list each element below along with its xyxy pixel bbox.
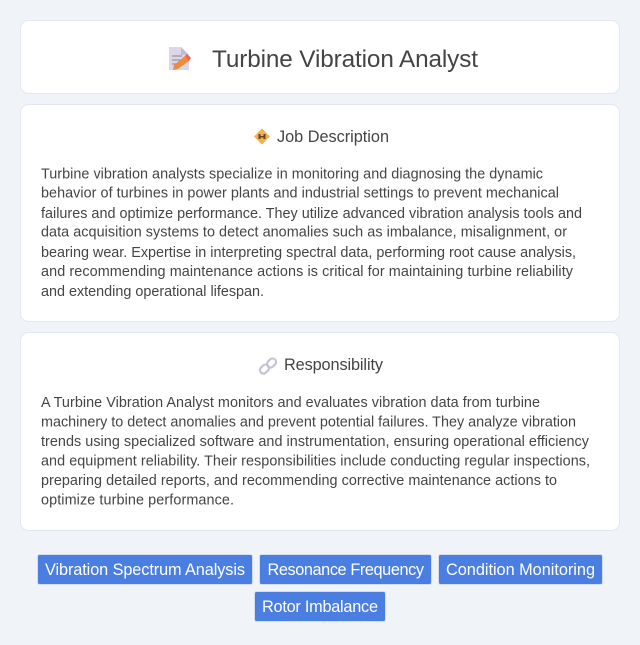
tag: condition monitoring: [438, 554, 602, 584]
tag: rotor imbalance: [254, 592, 386, 622]
responsibility text: preparing detailed reports, and recommending corrective maintenance actions to: [41, 473, 557, 489]
job description text: and recommending maintenance actions is critical for maintaining turbine reliability: [41, 264, 574, 280]
job description text: data acquisition systems to detect anomalies such as imbalance, misalignment, or: [41, 224, 567, 240]
icon: diamond sign: [254, 128, 270, 144]
heading: responsibility: Responsibility: [284, 356, 384, 374]
panel: title: [20, 20, 620, 94]
job description text: [41, 166, 582, 300]
responsibility text: machinery to detect anomalies and prevent potential failures. They analyze vibration: [41, 414, 576, 430]
title text: Turbine Vibration Analyst: [212, 46, 478, 73]
icon: chain link: [258, 357, 278, 375]
tag: condition monitoring: Condition Monitoring: [446, 561, 595, 579]
panel: job description: [20, 104, 620, 322]
tag: rotor imbalance: Rotor Imbalance: [262, 598, 378, 616]
job description text: behavior of turbines in power plants and industrial settings to prevent mechanical: [41, 186, 559, 202]
job description text: and extending operational lifespan.: [41, 284, 264, 300]
responsibility text: and equipment reliability. Their responsibilities include conducting regular inspections,: [41, 454, 590, 470]
icon: document with pencil: [169, 47, 191, 70]
tag: resonance frequency: [260, 554, 432, 584]
tag: vibration spectrum analysis: [38, 554, 252, 584]
responsibility text: [41, 395, 590, 508]
job description text: bearing wear. Expertise in interpreting spectral data, performing root cause analysis,: [41, 245, 576, 261]
panel: responsibility: [20, 332, 620, 530]
job description text: failures and optimize performance. They utilize advanced vibration analysis tools and: [41, 206, 582, 222]
job description text: Turbine vibration analysts specialize in monitoring and diagnosing the dynamic: [41, 166, 543, 182]
responsibility text: A Turbine Vibration Analyst monitors and evaluates vibration data from turbine: [41, 395, 540, 411]
tag: resonance frequency: Resonance Frequency: [268, 561, 425, 579]
heading: job description: Job Description: [277, 128, 389, 146]
responsibility text: optimize turbine performance.: [41, 492, 234, 508]
responsibility text: trends using specialized software and instrumentation, ensuring operational efficiency: [41, 434, 590, 450]
tag: vibration spectrum analysis: Vibration Spectrum Analysis: [45, 561, 245, 579]
